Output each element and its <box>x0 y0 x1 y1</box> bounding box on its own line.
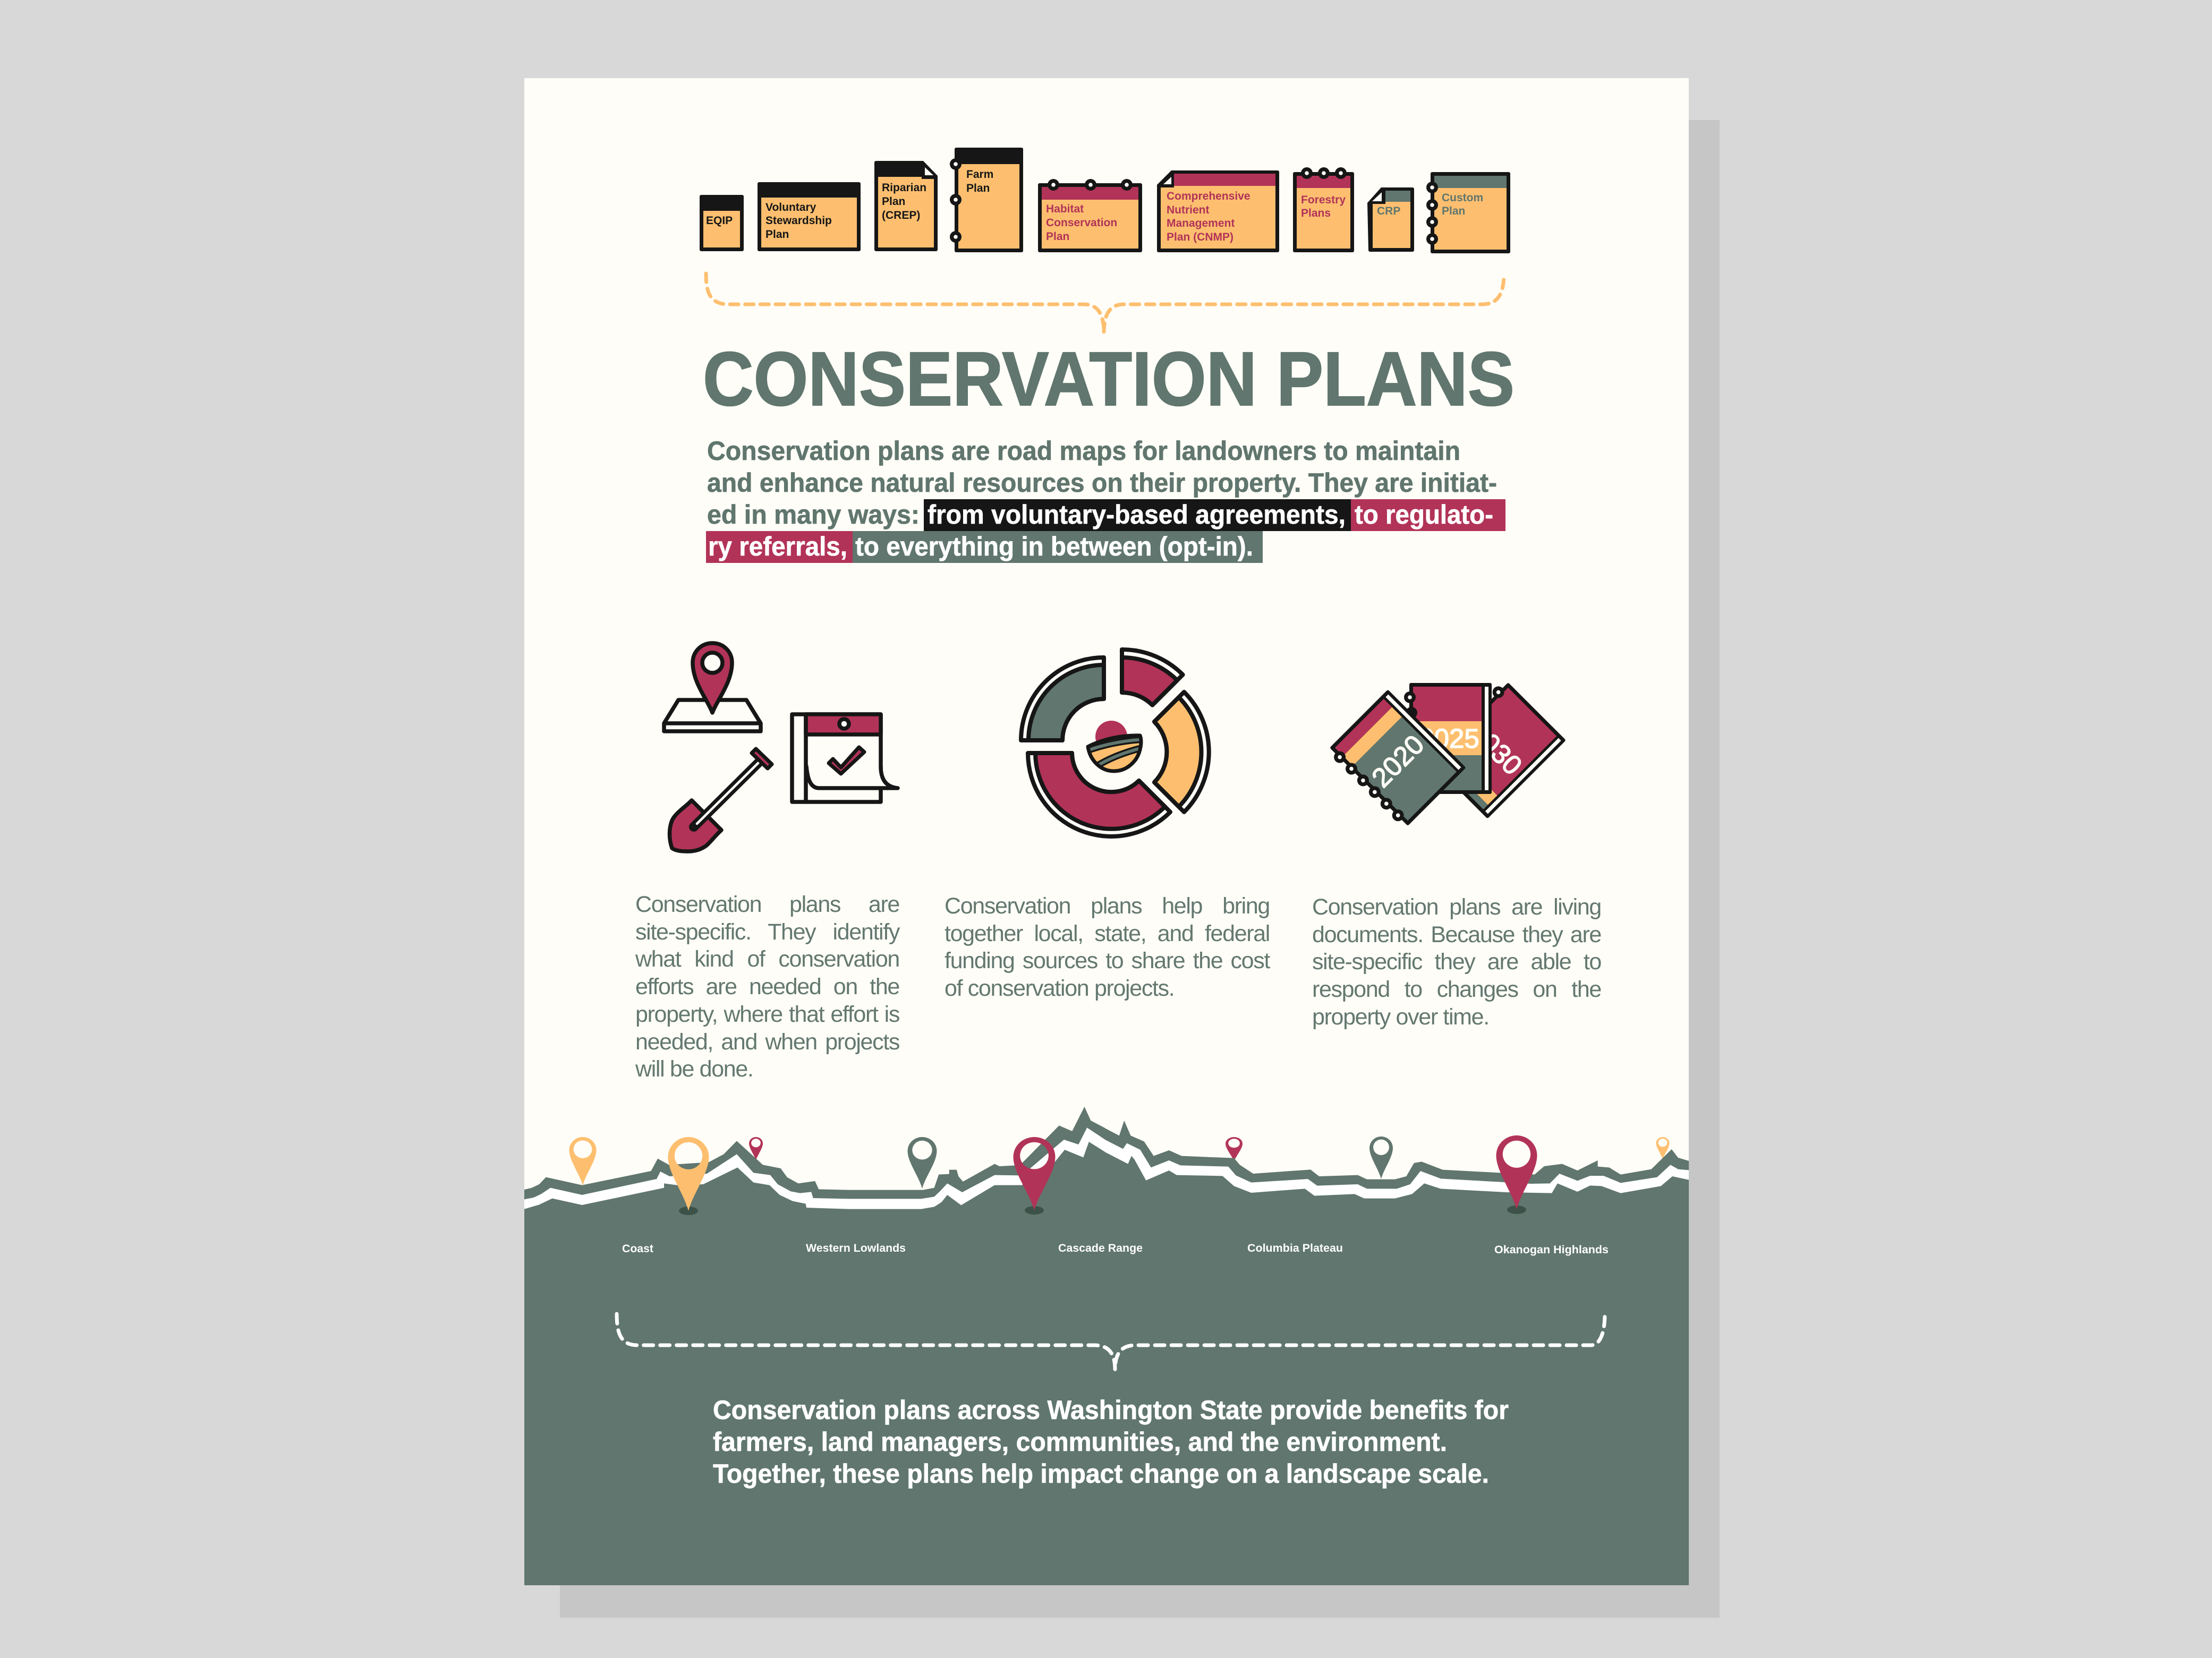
region labels <box>622 1242 1609 1256</box>
text block: living documents column: property over time. <box>1312 1004 1489 1030</box>
map pins in front of the ridge <box>569 1135 1537 1215</box>
intro text lines: ry referrals, <box>708 532 847 561</box>
document: Forestry Plans: Forestry <box>1301 194 1346 206</box>
document: Forestry Plans <box>1293 167 1354 252</box>
text block: living documents column: site-specific they are able to <box>1312 949 1601 975</box>
closing statement <box>713 1395 1509 1489</box>
donut segment: large crimson <box>1028 753 1170 836</box>
document: EQIP <box>700 195 744 251</box>
donut segment: orange <box>1154 692 1209 812</box>
document: Custom Plan: Plan <box>1442 205 1465 217</box>
pin: small orange <box>569 1137 596 1185</box>
document: Farm Plan <box>950 148 1023 252</box>
text block: site-specific column: Conservation plans are <box>635 892 899 917</box>
intro text lines: ed in many ways: <box>707 500 920 529</box>
text block: site-specific column: efforts are needed on the <box>635 974 899 999</box>
document: Riparian Plan (CREP) <box>874 161 938 251</box>
donut segment: green <box>1021 657 1104 740</box>
document: Voluntary Stewardship Plan: Voluntary <box>765 201 816 213</box>
document: 2030: 2030 <box>1464 717 1528 781</box>
intro text lines <box>707 436 1497 561</box>
text block: funding column: together local, state, and federal <box>945 921 1270 946</box>
icon: site pin, shovel and calendar <box>664 643 898 851</box>
document: 2025 <box>1404 683 1492 794</box>
document: Comprehensive Nutrient Management Plan: Management <box>1167 217 1235 229</box>
document: Custom Plan <box>1426 172 1510 253</box>
document: Comprehensive Nutrient Management Plan: Plan (CNMP) <box>1167 231 1233 243</box>
document: Riparian Plan (CREP): (CREP) <box>882 209 920 221</box>
region labels: Coast <box>622 1242 653 1255</box>
icon: funding donut chart <box>1021 649 1209 836</box>
region labels: Okanogan Highlands <box>1494 1243 1609 1256</box>
text block: living documents column: documents. Because they are <box>1312 922 1601 947</box>
document: CRP <box>1367 187 1414 252</box>
text block: funding column: Conservation plans help bring <box>945 893 1270 919</box>
document: Farm Plan: Farm <box>966 168 993 181</box>
icon: shovel <box>669 749 772 851</box>
pin: green lowlands <box>907 1137 937 1189</box>
pin: crimson highlands <box>1496 1135 1537 1214</box>
region labels: Western Lowlands <box>806 1242 906 1254</box>
text block: site-specific column: needed, and when projects <box>635 1029 899 1055</box>
document: Habitat Conservation Plan: Conservation <box>1046 217 1117 229</box>
region labels: Columbia Plateau <box>1247 1242 1343 1254</box>
region labels: Cascade Range <box>1058 1242 1143 1254</box>
text block: funding column: of conservation projects. <box>945 976 1174 1001</box>
text block: site-specific column <box>635 892 900 1082</box>
intro text lines: to everything in between (opt-in). <box>855 532 1253 561</box>
text block: funding column <box>945 893 1270 1001</box>
pin: green plateau <box>1369 1136 1393 1179</box>
icon: sun over farm field <box>1084 721 1145 771</box>
text block: site-specific column: property, where that effort is <box>635 1002 899 1027</box>
document: Riparian Plan (CREP): Plan <box>882 195 905 208</box>
document: EQIP: EQIP <box>706 215 733 227</box>
icon: calendar <box>792 714 898 802</box>
pin: crimson cascades <box>1014 1137 1055 1215</box>
text block: site-specific column: site-specific. They identify <box>635 919 899 945</box>
map pins behind the ridge <box>749 1137 1669 1161</box>
text block: site-specific column: will be done. <box>635 1056 753 1082</box>
intro text lines: and enhance natural resources on their property. They are initiat- <box>707 468 1497 498</box>
text block: site-specific column: what kind of conservation <box>635 946 899 972</box>
poster page <box>524 78 1689 1585</box>
donut segment: small crimson <box>1122 649 1183 705</box>
page shadow <box>560 120 1720 1618</box>
intro paragraph with highlights <box>706 436 1505 563</box>
document: Voluntary Stewardship Plan: Stewardship <box>765 215 832 227</box>
document: Riparian Plan (CREP): Riparian <box>882 182 926 194</box>
intro text lines: from voluntary-based agreements, <box>928 500 1346 529</box>
document: Habitat Conservation Plan: Habitat <box>1046 203 1084 215</box>
title: CONSERVATION PLANS <box>703 336 1515 422</box>
document: Habitat Conservation Plan <box>1038 179 1142 252</box>
mountain landscape ridge <box>524 1107 1689 1585</box>
document: Comprehensive Nutrient Management Plan <box>1157 170 1279 252</box>
document: 2030 <box>1425 678 1566 819</box>
icon: location pin <box>693 643 732 713</box>
highlight bars <box>706 499 1505 563</box>
document: 2020: 2020 <box>1366 729 1430 793</box>
closing statement: farmers, land managers, communities, and the environment. <box>713 1427 1447 1457</box>
document: Comprehensive Nutrient Management Plan: Nutrient <box>1167 204 1209 216</box>
document: Comprehensive Nutrient Management Plan: Comprehensive <box>1167 190 1250 202</box>
text block: funding column: funding sources to share the cost <box>945 948 1270 973</box>
document: CRP: CRP <box>1377 205 1400 217</box>
closing statement: Conservation plans across Washington State provide benefits for <box>713 1395 1509 1425</box>
plan documents row <box>700 148 1510 253</box>
pin: large orange <box>668 1137 709 1215</box>
document: Habitat Conservation Plan: Plan <box>1046 230 1069 243</box>
document: Custom Plan: Custom <box>1442 192 1483 204</box>
document: Farm Plan: Plan <box>966 182 990 194</box>
closing statement: Together, these plans help impact change on a landscape scale. <box>713 1459 1489 1489</box>
icon: living documents by year <box>1326 678 1566 830</box>
document: Forestry Plans: Plans <box>1301 207 1331 219</box>
document: Voluntary Stewardship Plan: Plan <box>765 228 789 241</box>
icon: map base <box>664 700 761 731</box>
document: Voluntary Stewardship Plan <box>758 182 861 251</box>
dashed brace under documents <box>706 274 1504 333</box>
document: 2025: 2025 <box>1419 723 1479 754</box>
document: 2020 <box>1326 689 1466 830</box>
text block: living documents column: respond to changes on the <box>1312 977 1601 1002</box>
intro text lines: Conservation plans are road maps for landowners to maintain <box>707 436 1460 466</box>
text block: living documents column: Conservation plans are living <box>1312 894 1601 920</box>
text block: living documents column <box>1312 894 1601 1030</box>
dashed brace above closing text <box>617 1314 1605 1370</box>
intro text lines: to regulato- <box>1355 500 1493 529</box>
